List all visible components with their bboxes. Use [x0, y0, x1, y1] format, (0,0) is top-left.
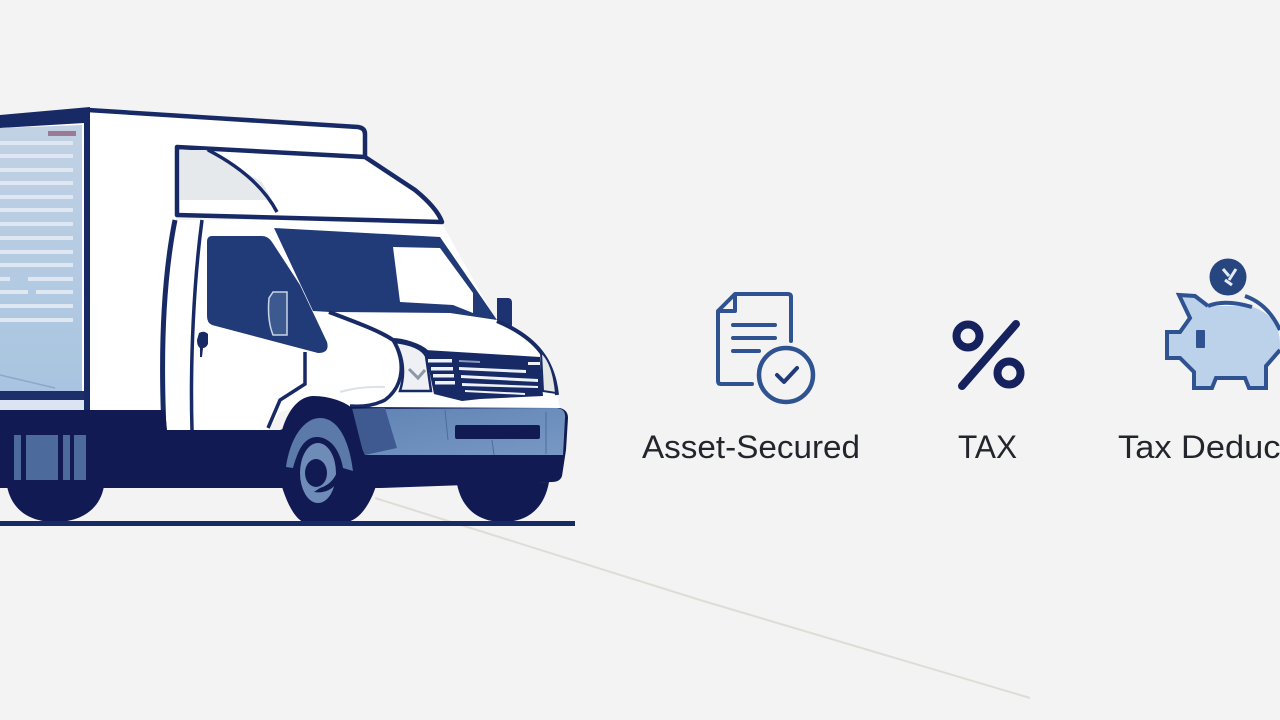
side mirror [268, 292, 287, 335]
cargo box top outline [88, 110, 365, 157]
icon: percent [956, 324, 1020, 386]
fender line [350, 340, 401, 406]
cab body [160, 220, 560, 430]
ground line [0, 521, 575, 526]
door handle [197, 332, 208, 357]
label: TAX: TAX [958, 429, 1017, 465]
item: tax deduction [1118, 258, 1280, 465]
windshield [274, 228, 497, 320]
cab pillars [163, 220, 175, 430]
chassis [0, 407, 568, 488]
item: tax [956, 324, 1020, 465]
icon: coin [1210, 258, 1246, 296]
icon: document with check [718, 294, 813, 402]
front wheel [278, 396, 376, 522]
truck illustration [0, 107, 575, 526]
roof fairing [177, 147, 442, 222]
shutter bottom rail [0, 391, 84, 400]
rear wheel [7, 486, 104, 522]
side window [207, 236, 328, 353]
cargo panel frame [0, 107, 90, 410]
windshield glare [393, 247, 473, 313]
right lamp [541, 352, 556, 393]
grille [425, 350, 543, 401]
label: Tax Deduct: Tax Deduct [1118, 429, 1280, 465]
hood outline [497, 321, 557, 395]
cargo box body [0, 109, 366, 415]
label: Asset-Secured: Asset-Secured [642, 429, 860, 465]
exterior mirror [497, 298, 512, 326]
chassis side vents [14, 435, 86, 480]
icon: piggy bank [1167, 258, 1280, 388]
bumper [345, 408, 565, 455]
ground shadow line [375, 498, 1030, 698]
headlight [395, 342, 431, 391]
front right wheel [457, 482, 549, 522]
item: asset-secured [642, 294, 860, 465]
side shutter panel [0, 125, 82, 391]
